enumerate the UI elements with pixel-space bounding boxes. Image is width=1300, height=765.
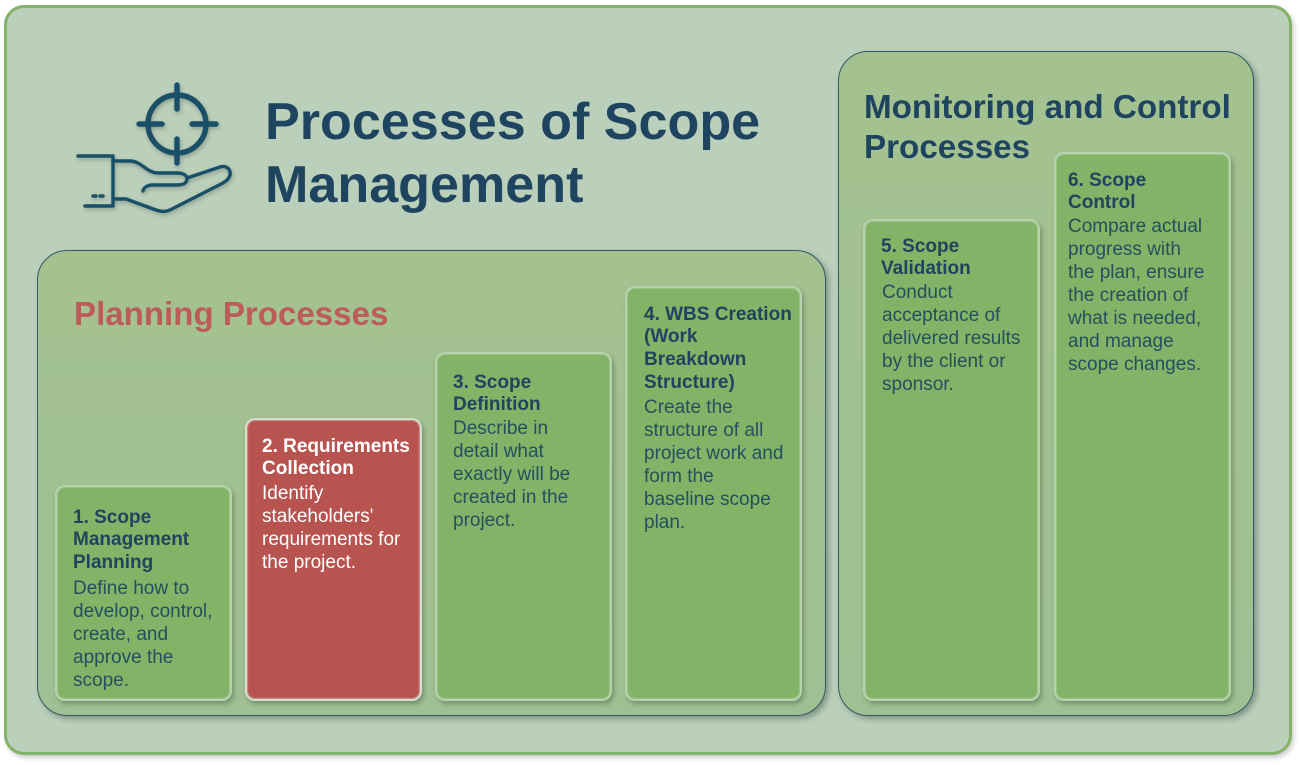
- card 3 text: 3. Scope: [453, 372, 531, 392]
- card 5 text: [881, 236, 1020, 395]
- card 2 text: stakeholders': [262, 506, 373, 527]
- heading: monitoring and control: [864, 88, 1231, 166]
- card 1 text: develop, control,: [73, 601, 212, 622]
- card 4 text: structure of all: [644, 420, 763, 441]
- card 6 text: the plan, ensure: [1068, 262, 1204, 283]
- card 1 text: approve the: [73, 647, 173, 668]
- card 2 text: 2. Requirements: [262, 436, 410, 456]
- card 5 text: by the client or: [882, 351, 1006, 372]
- card 4 text: 4. WBS Creation: [644, 304, 792, 324]
- card 6 text: progress with: [1068, 239, 1181, 260]
- card 6 text: the creation of: [1068, 285, 1188, 306]
- card 4 text: baseline scope: [644, 489, 771, 510]
- card 4 text: (Work: [644, 326, 697, 347]
- card 2 text: the project.: [262, 552, 356, 573]
- card 2 text: requirements for: [262, 529, 400, 550]
- card 3 text: Definition: [453, 394, 541, 415]
- card 2 text: Identify: [262, 483, 323, 504]
- card 1 text: Define how to: [73, 578, 189, 599]
- card 2: requirements collection: [245, 418, 422, 701]
- card 4: WBS creation: [625, 286, 802, 701]
- card 1 text: 1. Scope: [73, 506, 151, 528]
- card 4 text: [644, 304, 792, 533]
- card 4 text: plan.: [644, 512, 685, 533]
- card 4 text: form the: [644, 466, 714, 487]
- panel: monitoring and control processes: [838, 51, 1254, 716]
- heading: monitoring and control: Monitoring and Control: [864, 88, 1231, 126]
- card 6 text: what is needed,: [1068, 308, 1201, 329]
- panel: planning processes: [37, 250, 826, 716]
- card 2 text: [262, 436, 410, 573]
- card 1 text: Management: [73, 529, 189, 550]
- card 3 text: detail what: [453, 441, 544, 462]
- title: [265, 93, 760, 214]
- card 6 text: Control: [1068, 192, 1136, 213]
- card 3 text: Describe in: [453, 418, 548, 439]
- card 5 text: 5. Scope: [881, 236, 959, 256]
- card 3: scope definition: [435, 352, 612, 701]
- card 6 text: and manage: [1068, 331, 1174, 352]
- card 4 text: Structure): [644, 372, 735, 393]
- card 5 text: acceptance of: [882, 305, 1000, 326]
- card 1: scope management planning: [55, 485, 232, 701]
- card 6 text: [1068, 170, 1204, 375]
- title: Management: [265, 156, 583, 214]
- icon: hand holding target: [76, 82, 235, 217]
- card 4 text: Breakdown: [644, 349, 746, 370]
- heading: planning processes: Planning Processes: [74, 296, 388, 333]
- card 5 text: delivered results: [882, 328, 1020, 349]
- card 3 text: exactly will be: [453, 464, 570, 485]
- card 1 text: [73, 506, 212, 691]
- card 4 text: project work and: [644, 443, 783, 464]
- card 1 text: Planning: [73, 552, 153, 573]
- card 5 text: Validation: [881, 258, 971, 279]
- card 2 text: Collection: [262, 458, 354, 479]
- card 6 text: Compare actual: [1068, 216, 1202, 237]
- card 6: scope control: [1054, 152, 1231, 701]
- title: Processes of Scope: [265, 93, 760, 151]
- card 6 text: scope changes.: [1068, 354, 1201, 375]
- card 6 text: 6. Scope: [1068, 170, 1146, 190]
- card 3 text: project.: [453, 510, 515, 531]
- card 3 text: created in the: [453, 487, 568, 508]
- card 3 text: [453, 372, 570, 531]
- hand: [78, 156, 230, 211]
- card 5: scope validation: [863, 219, 1040, 701]
- card 5 text: sponsor.: [882, 374, 954, 395]
- card 1 text: scope.: [73, 670, 129, 691]
- card 4 text: Create the: [644, 397, 733, 418]
- card 5 text: Conduct: [882, 282, 953, 303]
- card 1 text: create, and: [73, 624, 168, 645]
- heading: monitoring and control: Processes: [864, 128, 1030, 166]
- target circle: [139, 85, 216, 163]
